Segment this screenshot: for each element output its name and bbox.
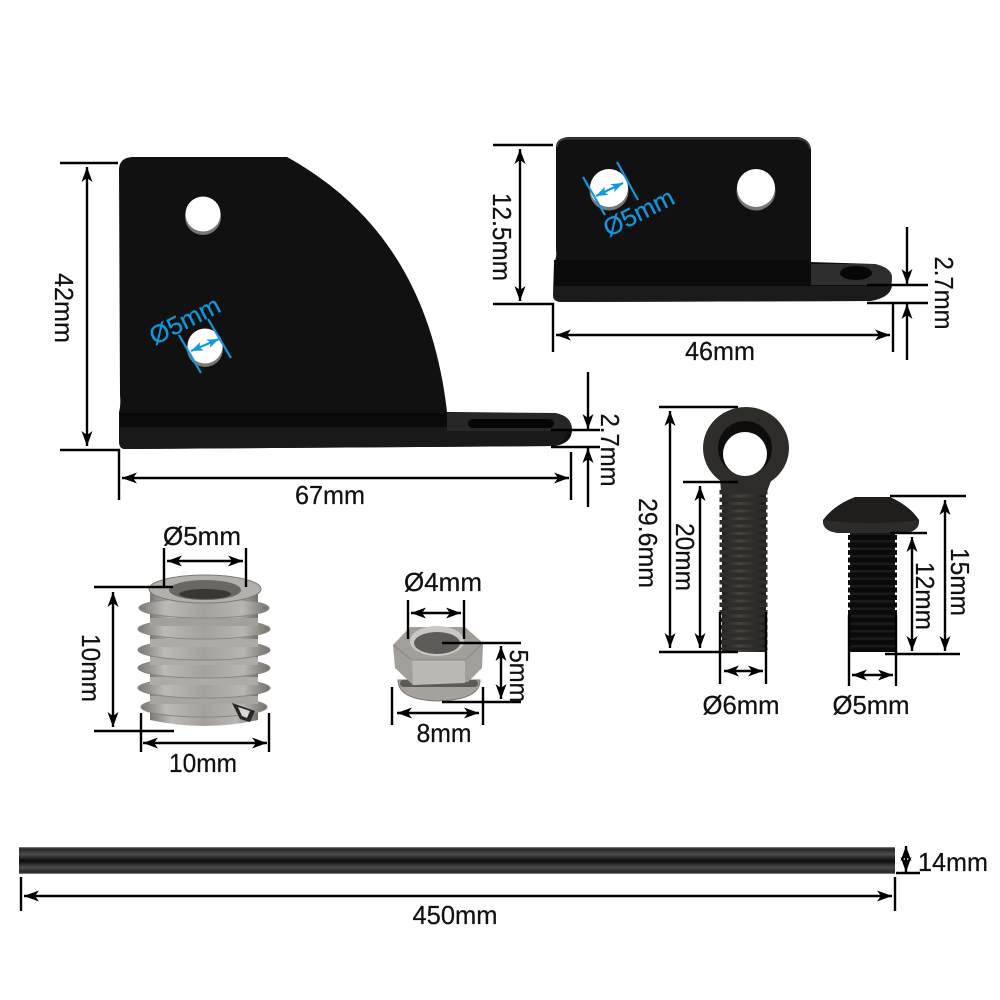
dimension: bolt length 15mm: 15mm — [945, 548, 975, 616]
dimension: nut height 5mm — [442, 643, 534, 702]
dimension: insert height 10mm: 10mm — [76, 634, 106, 702]
threaded insert — [138, 575, 270, 726]
blue callout: small bracket hole diameter — [583, 162, 679, 243]
blue callout: large bracket hole diameter: Ø5mm — [145, 291, 225, 351]
blue callout: large bracket hole diameter — [145, 291, 231, 373]
dimension: rod length 450mm — [21, 877, 895, 930]
blue callout: small bracket hole diameter: Ø5mm — [599, 183, 679, 243]
button head bolt — [823, 497, 919, 652]
dimension: nut inner diameter 4mm — [404, 567, 482, 639]
dimension: 2.7mm large bracket: 2.7mm — [595, 414, 625, 486]
dimension: 67mm: 67mm — [295, 480, 365, 510]
dimension: 46mm: 46mm — [685, 336, 755, 366]
dimension: bolt thread 12mm — [890, 533, 940, 651]
dimension: insert width 10mm: 10mm — [169, 748, 237, 778]
dimension: bolt diameter 5mm: Ø5mm — [832, 690, 910, 720]
dimension: 2.7mm large bracket — [551, 372, 625, 507]
small bracket — [553, 137, 892, 302]
dimension: 2.7mm small bracket — [867, 227, 959, 360]
dimension: nut inner diameter 4mm: Ø4mm — [404, 567, 482, 597]
dimension: eye bolt length 29.6mm: 29.6mm — [633, 498, 663, 588]
dimension: insert diameter 5mm: Ø5mm — [163, 521, 241, 551]
dimension: 42mm: 42mm — [49, 273, 79, 343]
dimension: 42mm — [49, 163, 119, 500]
dimension: nut width 8mm: 8mm — [416, 718, 472, 748]
dimension: rod diameter 14mm: 14mm — [918, 847, 988, 877]
dimension: eye bolt diameter 6mm: Ø6mm — [702, 690, 780, 720]
dimension: insert height 10mm — [76, 587, 174, 731]
dimension: insert diameter 5mm — [163, 521, 246, 587]
dimension: eye bolt diameter 6mm — [702, 612, 780, 720]
dimension: eye bolt thread 20mm: 20mm — [670, 523, 700, 591]
dimension: bolt diameter 5mm — [832, 615, 910, 720]
dimension: eye bolt length 29.6mm — [633, 407, 738, 652]
dimension: nut width 8mm — [392, 687, 483, 748]
dimension: nut height 5mm: 5mm — [504, 650, 534, 702]
dimension: 2.7mm small bracket: 2.7mm — [929, 256, 959, 330]
rod — [19, 847, 895, 874]
eye bolt — [703, 407, 789, 652]
dimension: 12.5mm: 12.5mm — [487, 193, 517, 281]
dimension: insert width 10mm — [141, 713, 269, 778]
dimension: bolt length 15mm — [885, 496, 975, 654]
large bracket — [119, 157, 572, 449]
dimension: rod length 450mm: 450mm — [412, 900, 498, 930]
lock nut — [393, 626, 483, 701]
dimension: 12.5mm — [487, 145, 553, 352]
dimension: bolt thread 12mm: 12mm — [910, 562, 940, 630]
